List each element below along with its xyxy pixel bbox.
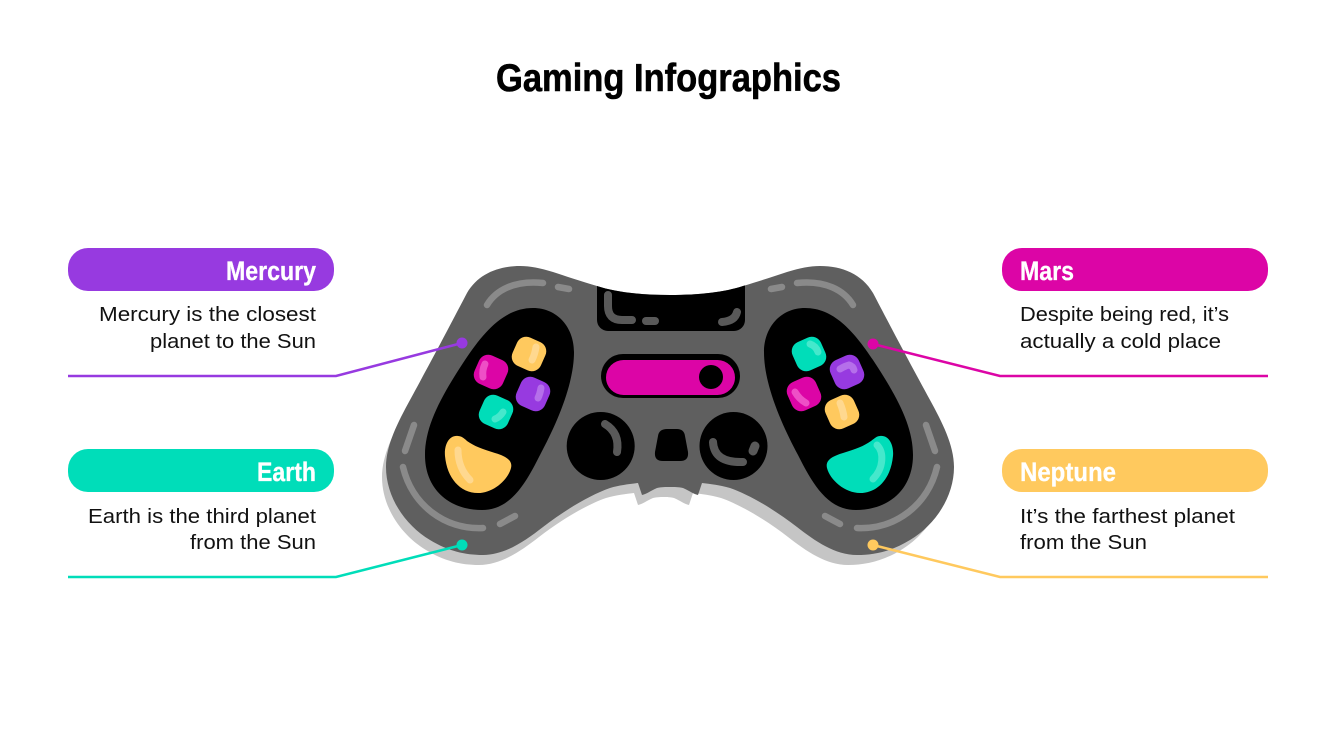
magenta button [471, 352, 511, 392]
panel: Mercury [68, 248, 334, 353]
Earth label pill: Earth [257, 457, 316, 487]
yellow button [822, 392, 862, 432]
title: Gaming Infographics [496, 57, 841, 100]
right stick [700, 412, 768, 480]
left buttons [471, 334, 553, 432]
Neptune label pill [1002, 449, 1268, 492]
connector: Earth [68, 540, 468, 577]
teal button [789, 334, 829, 374]
Mercury label pill: Mercury [226, 256, 316, 286]
panel: Neptune [1002, 449, 1268, 554]
panel: Mars [1002, 248, 1268, 353]
Mars description: Despite being red, it’s [1020, 303, 1229, 326]
body trim lines right [771, 282, 937, 528]
Mars description: actually a cold place [1020, 330, 1221, 353]
Mars label pill [1002, 248, 1268, 291]
yellow button [509, 334, 549, 374]
connector: Neptune [868, 540, 1268, 577]
left pad [425, 308, 574, 510]
right buttons [784, 334, 867, 432]
right pad [764, 308, 913, 510]
Neptune description [1020, 505, 1235, 554]
Earth description: from the Sun [190, 531, 316, 554]
Neptune description: from the Sun [1020, 531, 1147, 554]
body trim lines left [403, 282, 569, 528]
Mercury description [99, 303, 316, 353]
teal bean button [827, 436, 893, 493]
Earth label pill [68, 449, 334, 492]
connector: Mercury [68, 338, 468, 376]
purple button [827, 352, 867, 392]
teal button [476, 392, 516, 432]
magenta button [784, 374, 824, 414]
Neptune label pill: Neptune [1020, 457, 1116, 487]
Earth description [88, 505, 316, 554]
Neptune description: It’s the farthest planet [1020, 505, 1235, 528]
screen [597, 285, 745, 331]
slider [601, 354, 740, 398]
controller shadow [382, 438, 927, 565]
icon: game controller [377, 262, 954, 565]
Mercury label pill [68, 248, 334, 291]
infographic canvas [68, 62, 1268, 578]
Mercury description: Mercury is the closest [99, 303, 316, 326]
connector: Mars [868, 338, 1268, 376]
left stick [567, 412, 635, 480]
center button [655, 429, 688, 461]
panel: Earth [68, 449, 334, 554]
Earth description: Earth is the third planet [88, 505, 316, 528]
purple button [513, 374, 553, 414]
Mercury description: planet to the Sun [150, 330, 316, 353]
Mars label pill: Mars [1020, 256, 1074, 286]
controller body [386, 266, 954, 555]
Mars description [1020, 303, 1229, 353]
yellow bean button [445, 436, 511, 493]
